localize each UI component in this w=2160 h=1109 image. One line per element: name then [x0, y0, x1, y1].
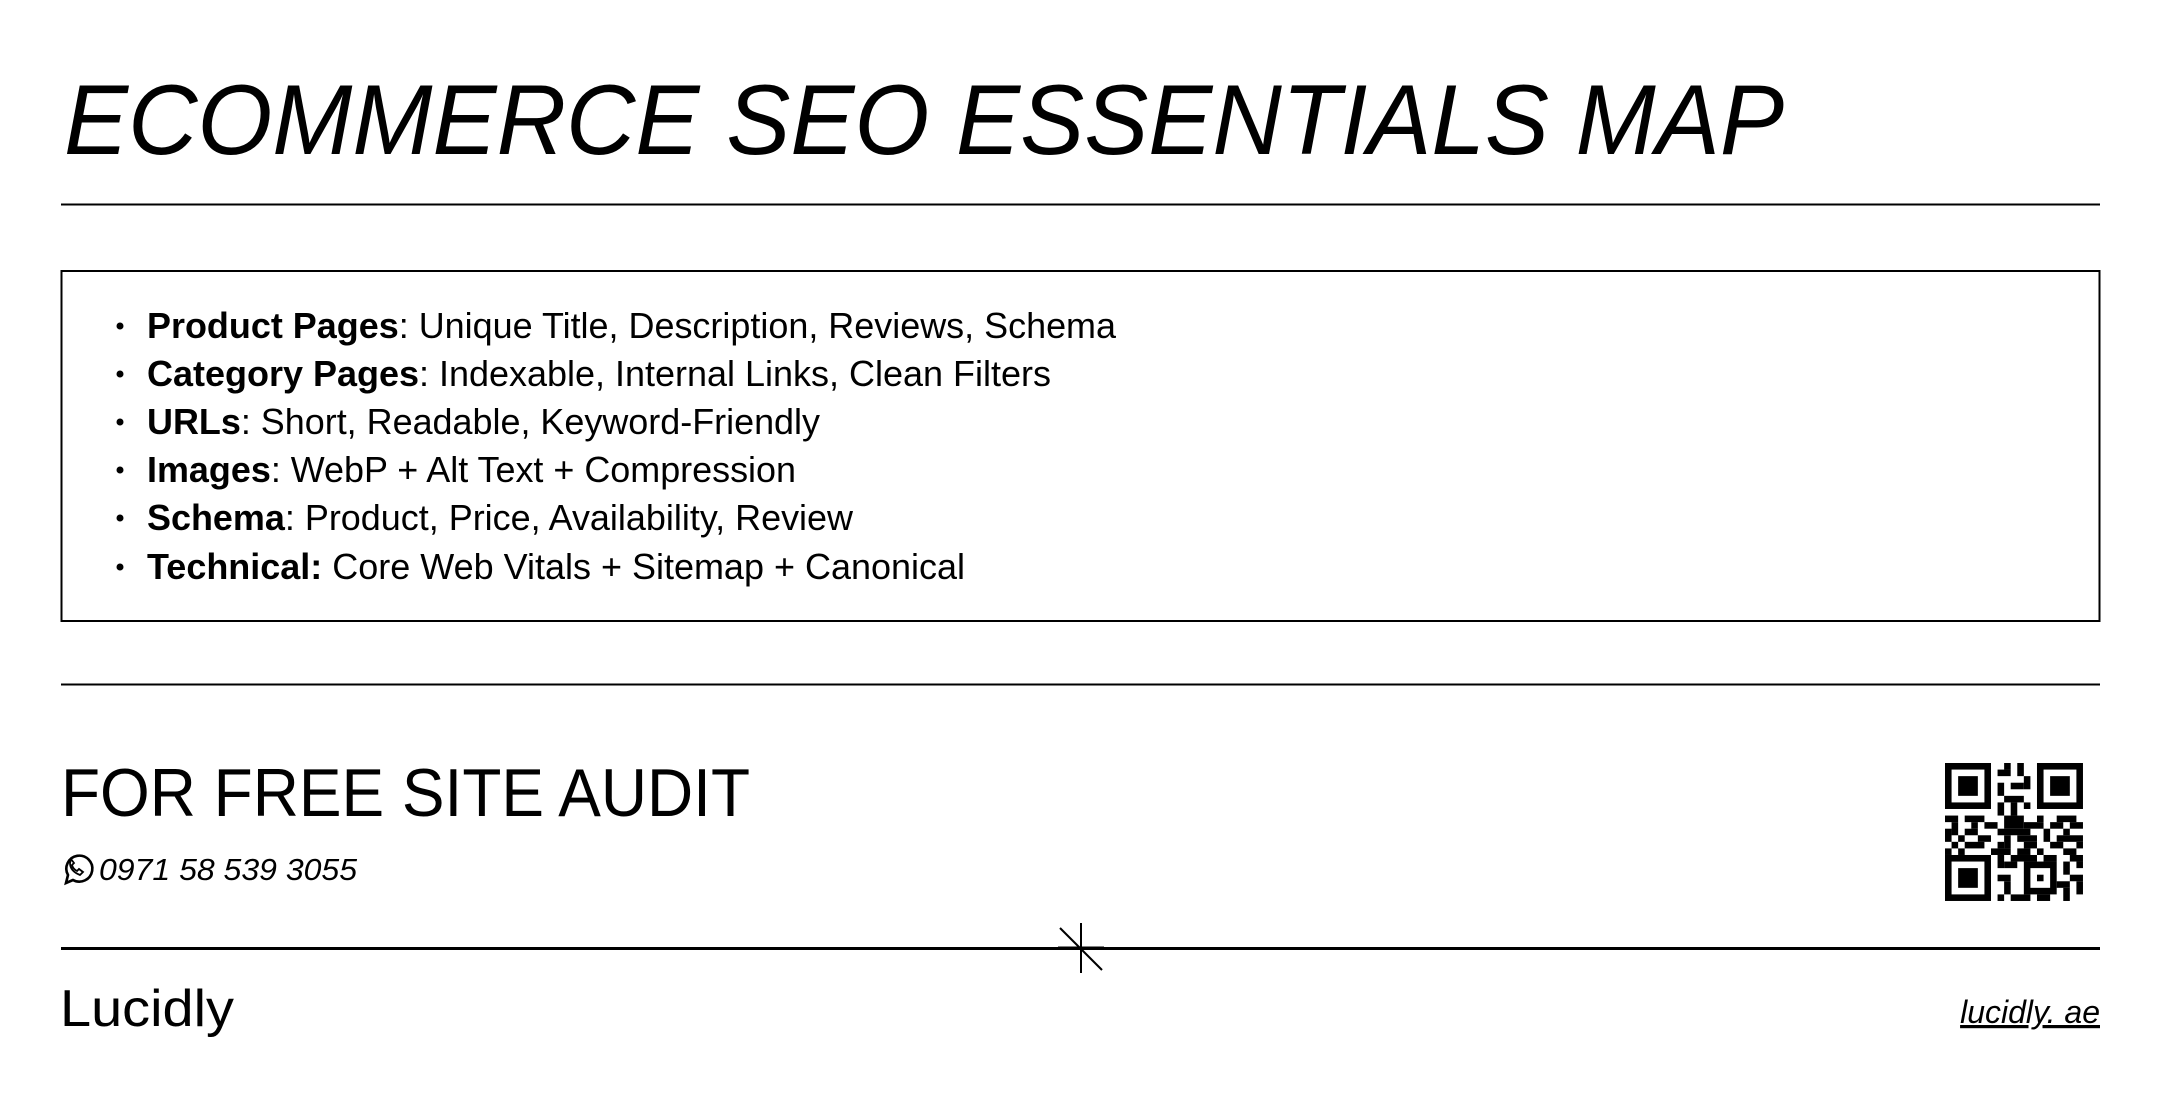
list item: schema: Schema: Product, Price, Availability, Review [147, 497, 854, 538]
link: lucidly.ae: lucidly. ae [1960, 994, 2100, 1030]
list item: technical: Technical: Core Web Vitals + Sitemap + Canonical [147, 546, 965, 587]
list item: urls: URLs: Short, Readable, Keyword-Friendly [147, 401, 820, 442]
title: ECOMMERCE SEO ESSENTIALS MAP [64, 64, 1784, 175]
list item: category pages: Category Pages: Indexable, Internal Links, Clean Filters [147, 353, 1051, 394]
list item: images: Images: WebP + Alt Text + Compression [147, 449, 796, 490]
list item: product pages: Product Pages: Unique Title, Description, Reviews, Schema [147, 305, 1117, 346]
icon: asterisk mark [1058, 923, 1104, 973]
qr code [1945, 763, 2083, 901]
icon: whatsapp [66, 856, 92, 883]
panel: essentials list [62, 271, 2100, 621]
contact: phone: 0971 58 539 3055 [99, 852, 358, 887]
heading: free site audit: FOR FREE SITE AUDIT [61, 755, 750, 831]
logo: Lucidly: Lucidly [60, 980, 234, 1038]
